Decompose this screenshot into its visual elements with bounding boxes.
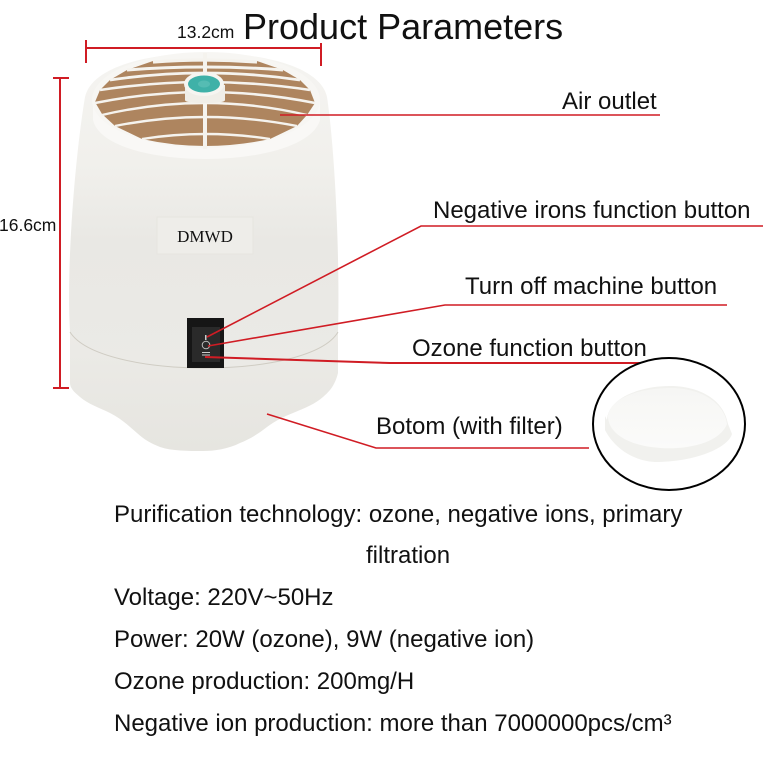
- callout: turn off button: [208, 273, 727, 346]
- rocker switch: [187, 318, 224, 368]
- dimension: width: [86, 40, 321, 66]
- width label: 13.2cm: [177, 22, 234, 42]
- callout: negative ions button: Negative irons function button: [433, 197, 751, 224]
- specifications: Ozone production: 200mg/H: [114, 668, 414, 695]
- callout: ozone button: [205, 335, 655, 363]
- base seam: [70, 332, 338, 368]
- specifications: Purification technology: ozone, negative ions, primary: [114, 501, 682, 528]
- specifications: Negative ion production: more than 7000000pcs/cm³: [114, 710, 672, 737]
- callout: bottom with filter: Botom (with filter): [376, 413, 563, 440]
- specifications: Power: 20W (ozone), 9W (negative ion): [114, 626, 534, 653]
- specifications: Voltage: 220V~50Hz: [114, 584, 334, 611]
- label DMWD: DMWD: [177, 227, 233, 246]
- collar around the vent: [93, 100, 320, 159]
- base: [70, 332, 338, 451]
- title: Product Parameters: [243, 6, 563, 47]
- air outlet grille: [95, 53, 315, 149]
- center knob: [184, 72, 225, 103]
- height label: 16.6cm: [0, 215, 56, 235]
- callout: turn off button: Turn off machine button: [465, 273, 717, 300]
- vent rim: [92, 52, 320, 148]
- specifications: [114, 501, 682, 737]
- product: air purifier: [69, 52, 338, 451]
- callout: negative ions button: [207, 197, 763, 337]
- specifications: filtration: [366, 542, 450, 569]
- filter inset: [593, 358, 745, 490]
- dimension: height: [53, 78, 69, 388]
- upper body: [69, 53, 338, 368]
- callout: ozone button: Ozone function button: [412, 335, 647, 362]
- label DMWD: [157, 217, 253, 254]
- callout: air outlet: Air outlet: [562, 88, 657, 115]
- callout: bottom with filter: [267, 413, 589, 448]
